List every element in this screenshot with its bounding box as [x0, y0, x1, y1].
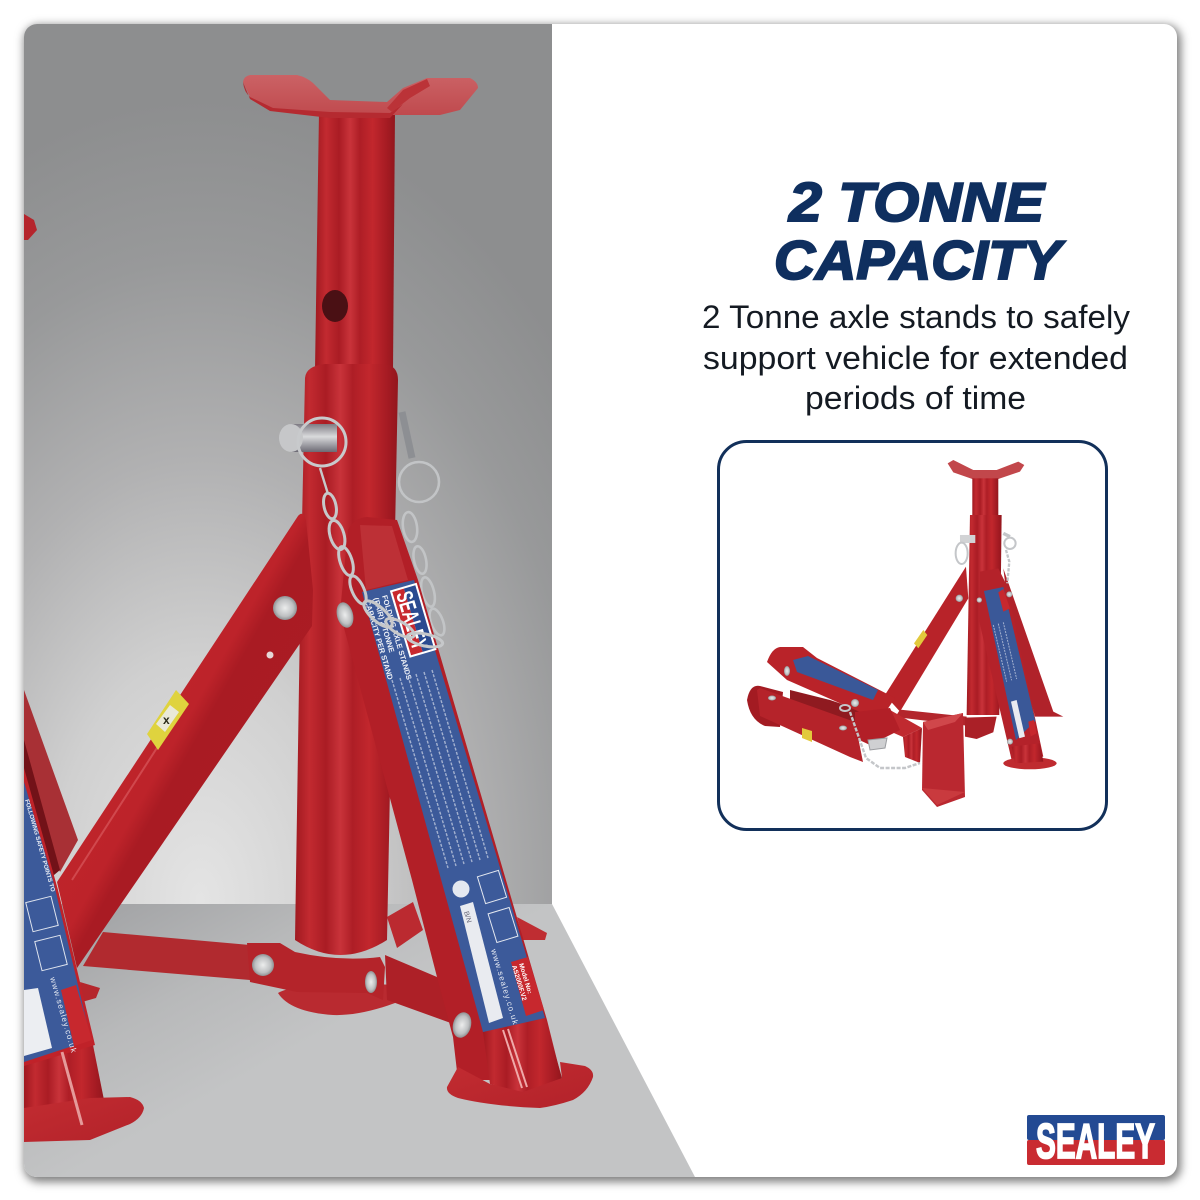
label: serial number strip — [460, 902, 503, 1023]
axle stand: lower tube stripes — [483, 1018, 562, 1092]
axle stand: left leg with warning sticker — [57, 514, 313, 968]
second stand, partly cropped: FOLLOWING SAFETY POINTS TO — [23, 799, 55, 893]
label: product name: (PAIR) 2 TONNE — [371, 597, 396, 654]
axle stand: product label — [362, 580, 545, 1032]
description text: 2 Tonne axle stands to safely — [702, 299, 1130, 335]
second stand, partly cropped — [23, 214, 144, 1142]
label: instruction lines — [392, 670, 488, 868]
description text: periods of time — [805, 380, 1026, 416]
title: 2 TONNE — [788, 171, 1046, 233]
axle stand: right arm — [385, 955, 450, 1022]
title — [774, 171, 1065, 291]
label: model number: AS2000F.V2 — [510, 965, 528, 1002]
axle stand: back arm and foot — [387, 902, 547, 948]
axle stand: front leg — [340, 517, 562, 1080]
label: product name — [366, 595, 412, 680]
inset: folded and upright axle stands — [747, 460, 1063, 807]
axle stand: saddle — [243, 75, 478, 118]
inset: folded stand — [747, 647, 965, 807]
axle stand: leg bolts — [334, 600, 474, 1040]
inset panel: folded stand — [718, 442, 1106, 830]
axle stand: upper tube — [315, 112, 395, 370]
axle stand: foot — [447, 1062, 593, 1108]
axle stand: rear chain — [399, 412, 447, 637]
axle stand: base flange — [278, 984, 395, 1015]
panel: product photo — [23, 24, 695, 1177]
inset: upright stand — [885, 460, 1063, 769]
axle stand: left leg with warning sticker: x — [163, 713, 170, 727]
safety chain — [320, 468, 444, 650]
label: serial number strip: B/N — [462, 911, 472, 924]
label: website: www.sealey.co.uk — [489, 947, 520, 1026]
label: model number: Model No: — [517, 963, 533, 995]
axle stand: collar bracket — [247, 943, 385, 993]
locking pin — [279, 418, 346, 466]
axle stand: base arm — [83, 932, 250, 980]
label: brand — [390, 583, 437, 658]
label: product name: FOLDING AXLE STANDS — [380, 594, 414, 681]
second stand, partly cropped: www.sealey.co.uk — [48, 975, 79, 1054]
label: icons — [453, 870, 518, 943]
description text — [702, 299, 1130, 416]
label: model number — [510, 957, 544, 1016]
axle stand: front leg shading — [360, 525, 408, 590]
label: product name: CAPACITY PER STAND — [363, 599, 395, 681]
label: brand: SEALEY — [391, 588, 433, 653]
axle stand: main lower tube — [295, 364, 398, 955]
title: CAPACITY — [774, 229, 1065, 291]
description text: support vehicle for extended — [703, 340, 1128, 376]
